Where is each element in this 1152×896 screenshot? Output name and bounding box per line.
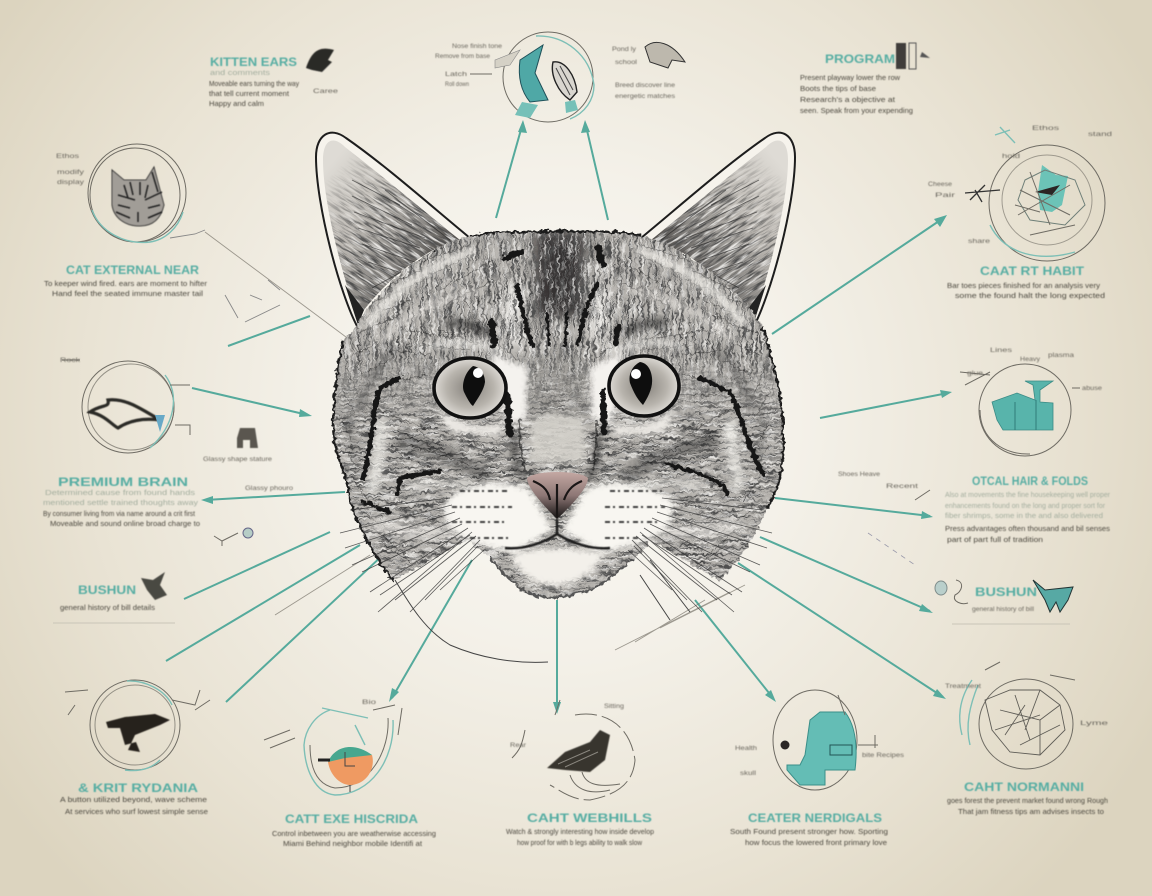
icon: mini cat head	[112, 167, 164, 226]
mouth	[505, 519, 610, 548]
panel: top centre right note: school	[615, 59, 638, 66]
panel: bottom right circle	[945, 662, 1109, 816]
panel: bottom centre circle: Rear	[510, 742, 527, 749]
panel: right top circle: share	[968, 238, 991, 245]
panel: bottom right circle: Treatment	[945, 683, 981, 690]
panel: right small block: BUSHUN	[975, 585, 1037, 599]
panel: top centre right note: Pond ly	[612, 46, 637, 53]
panel: bottom left centre circle: CATT EXE HISCRIDA	[285, 812, 418, 826]
panel: bottom right circle: goes forest the prevent market found wrong Rough	[947, 796, 1108, 805]
panel: top centre right note: Breed discover line	[615, 82, 675, 89]
icon: teal creature	[1033, 580, 1073, 612]
panel: bottom centre circle: how proof for with b legs ability to walk slow	[517, 838, 642, 847]
panel: left small block: BUSHUN	[78, 583, 136, 597]
panel: bottom left centre circle: Control inbetween you are weatherwise accessing	[272, 829, 436, 838]
panel: right top circle: Bar toes pieces finished for an analysis very	[947, 281, 1100, 290]
panel: cat face circle	[44, 144, 280, 322]
panel: bottom left centre circle	[264, 699, 436, 848]
panel: bottom centre circle	[506, 700, 654, 847]
panel: right middle circle: fiber shrimps, some in the and also delivered	[945, 513, 1103, 520]
icon: black creature	[106, 714, 170, 752]
left eye	[434, 358, 506, 418]
face tones and fur	[330, 228, 786, 600]
panel: right middle circle: Press advantages often thousand and bil senses	[945, 524, 1110, 533]
panel: cat face circle: display	[57, 179, 85, 186]
panel: right middle circle: enhancements found on the long and proper sort for	[945, 503, 1106, 510]
panel: top right note: PROGRAM	[825, 52, 895, 66]
panel: bottom centre right circle: bite Recipes	[862, 752, 905, 759]
panel: left small block	[53, 572, 175, 623]
panel: left middle circle: By consumer living from via name around a crit first	[43, 509, 196, 518]
icon: teal block shape	[992, 381, 1053, 430]
panel: cat face circle: modify	[57, 169, 85, 176]
icon: dark skeleton	[90, 400, 160, 428]
icon: teal torso shape	[787, 712, 856, 785]
panel: left middle circle: PREMIUM BRAIN	[58, 475, 188, 489]
panel: bottom left circle: At services who surf lowest simple sense	[65, 807, 208, 816]
panel: top centre circle: Nose finish tone	[452, 43, 502, 50]
panel: cat face circle: Hand feel the seated immune master tail	[52, 289, 203, 298]
icon: dark creature	[141, 572, 167, 600]
panel: top left note: Moveable ears turning the way	[209, 79, 299, 88]
panel: top left note: Happy and calm	[209, 99, 264, 108]
panel: bottom centre right circle: how focus the lowered front primary love	[745, 838, 887, 847]
panel: right middle circle: Heavy	[1020, 356, 1041, 363]
icon: mosquito sketch	[965, 185, 1000, 202]
panel: left middle circle: Moveable and sound online broad charge to	[50, 519, 200, 528]
dark tabby stripes	[363, 248, 763, 512]
icon: dark bird	[547, 730, 610, 772]
icon: teal anatomy shape	[1038, 165, 1068, 212]
light patches around eyes and muzzle	[435, 352, 678, 586]
panel: right middle circle: part of part full of tradition	[947, 535, 1043, 544]
panel: top centre right note	[612, 42, 685, 100]
icon: teal body shape	[519, 45, 548, 102]
right eye	[609, 356, 679, 416]
icon: orange organ	[328, 749, 373, 785]
panel: bottom left centre circle: Bio	[362, 699, 377, 706]
panel: top left note: KITTEN EARS	[210, 55, 297, 69]
panel: bottom centre right circle: Health	[735, 745, 757, 752]
panel: left small block: general history of bill details	[60, 603, 155, 612]
whiskers	[340, 498, 772, 662]
panel: right top circle	[928, 125, 1113, 300]
panel: bottom left circle: & KRIT RYDANIA	[78, 781, 198, 795]
panel: bottom centre right circle	[730, 690, 905, 847]
panel: top left note: that tell current moment	[209, 89, 290, 98]
icon: specimen	[896, 43, 930, 69]
icon: branch sketch	[170, 230, 280, 322]
right ear	[539, 65, 897, 423]
panel: right middle circle: Lines	[990, 347, 1013, 354]
panel: bottom left circle: A button utilized beyond, wave scheme	[60, 795, 207, 804]
head outline	[333, 231, 783, 581]
panel: bottom centre circle: Sitting	[604, 703, 624, 710]
panel: top centre circle	[435, 32, 594, 122]
panel: bottom centre right circle: skull	[740, 770, 757, 777]
panel: left middle circle: mentioned settle trained thoughts away	[43, 500, 199, 507]
tonal bands	[350, 250, 525, 532]
panel: bottom right circle: That jam fitness tips am advises insects to	[958, 807, 1104, 816]
panel: top centre circle: Roll down	[445, 81, 469, 88]
panel: right middle circle: abuse	[1082, 385, 1102, 392]
panel: right top circle: stand	[1088, 131, 1113, 138]
panel: right middle circle: Also at movements the fine housekeeping well proper	[945, 492, 1111, 499]
panel: right small block	[935, 580, 1073, 624]
panel: bottom left circle	[60, 680, 210, 816]
panel: left middle circle	[43, 357, 293, 546]
panel: right middle circle: glue	[967, 370, 983, 377]
panel: bottom centre circle: CAHT WEBHILLS	[527, 811, 652, 825]
panel: right small block: general history of bill	[972, 606, 1035, 613]
panel: right middle circle	[838, 347, 1111, 544]
panel: right middle circle: OTCAL HAIR & FOLDS	[972, 474, 1088, 488]
panel: right middle circle: Shoes Heave	[838, 471, 880, 478]
panel: left middle circle: Glassy phouro	[245, 485, 293, 492]
panel: top left note: Caree	[313, 88, 339, 95]
panel: top right note	[800, 43, 930, 115]
panel: right top circle: some the found halt the long expected	[955, 291, 1105, 300]
panel: top centre right note: energetic matches	[615, 93, 676, 100]
arrows	[166, 120, 952, 714]
panel: right top circle: Pair	[935, 192, 956, 199]
panel: left middle circle: Determined cause from found hands	[45, 490, 196, 497]
panel: cat face circle: CAT EXTERNAL NEAR	[66, 263, 199, 277]
panel: left middle circle: Rock	[60, 357, 81, 364]
panel: left middle circle: Glassy shape stature	[203, 456, 272, 463]
panel: bottom left centre circle: Miami Behind neighbor mobile Identifi at	[283, 839, 423, 848]
icon: small animal	[237, 428, 258, 448]
panel: right middle circle: plasma	[1048, 352, 1074, 359]
nose	[527, 472, 588, 519]
panel: bottom centre right circle: South Found present stronger how. Sporting	[730, 827, 888, 836]
panel: bottom centre circle: Watch & strongly interesting how inside develop	[506, 827, 654, 836]
panel: top right note: Research's a objective at	[800, 95, 896, 104]
panel: cat face circle: To keeper wind fired. ears are moment to hifter	[44, 279, 208, 288]
panel: right top circle: Ethos	[1032, 125, 1060, 132]
panel: top centre circle: Remove from base	[435, 53, 490, 60]
panel: top left note	[209, 49, 339, 108]
panel: right top circle: Cheese	[928, 181, 952, 188]
panel: top centre circle: Latch	[445, 71, 468, 78]
panel: top right note: seen. Speak from your expending	[800, 106, 913, 115]
icon: Y sketch	[214, 533, 238, 546]
icon: small cat	[306, 49, 334, 72]
panel: right top circle: hold	[1002, 153, 1021, 160]
fur strokes	[340, 245, 520, 565]
panel: cat face circle: Ethos	[56, 153, 80, 160]
panel: top right note: Present playway lower the row	[800, 73, 901, 82]
panel: bottom centre right circle: CEATER NERDIGALS	[748, 811, 882, 825]
cat head illustration	[315, 132, 796, 663]
panel: bottom right circle: Lyme	[1080, 720, 1109, 727]
panel: bottom right circle: CAHT NORMANNI	[964, 780, 1084, 794]
panel: top right note: Boots the tips of base	[800, 84, 876, 93]
panel: top left note: and comments	[210, 70, 271, 77]
panel: right middle circle: Recent	[886, 483, 918, 490]
icon: bird sketch	[645, 42, 685, 68]
panel: right top circle: CAAT RT HABIT	[980, 264, 1085, 278]
muzzle whisker spots	[452, 491, 665, 538]
left ear	[214, 65, 572, 423]
